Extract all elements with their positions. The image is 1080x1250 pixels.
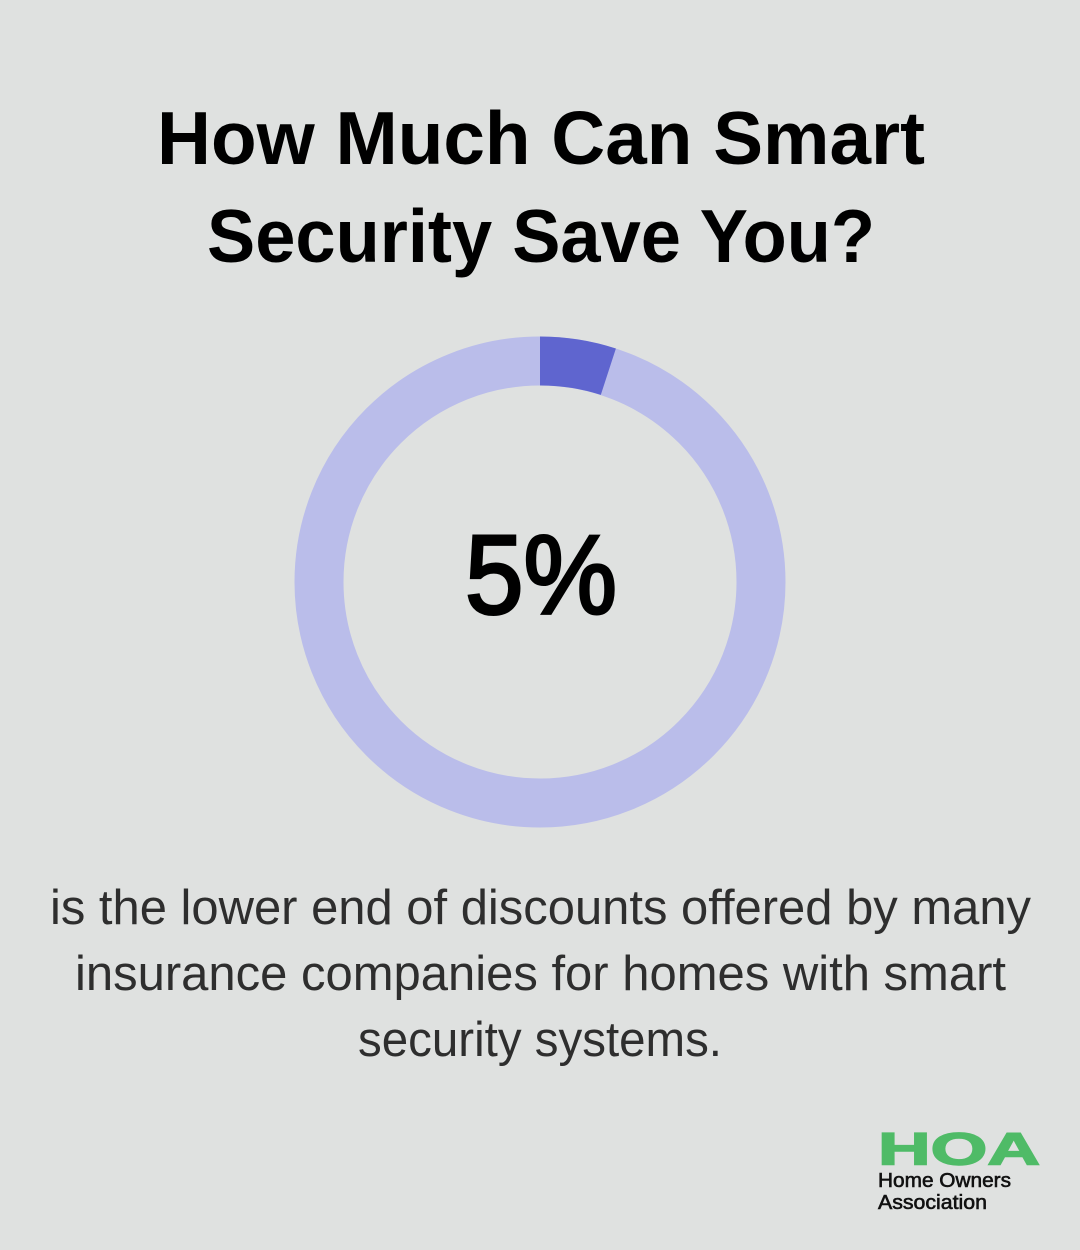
percentage value: 5% [465,512,617,638]
title [157,96,925,278]
logo: Home Owners Association [878,1124,1040,1214]
title: How Much Can Smart [157,96,925,180]
title: Security Save You? [207,194,875,278]
donut chart: 5% [319,336,761,803]
description text: security systems. [358,1013,722,1067]
description text: insurance companies for homes with smart [75,947,1006,1001]
logo wordmark: Association [878,1192,987,1214]
logo wordmark: Home Owners [878,1170,1011,1192]
description text: is the lower end of discounts offered by many [50,881,1031,935]
description text [50,881,1031,1067]
logo mark: HOA: HOA [878,1124,1040,1174]
highlighted wedge [540,336,616,395]
ring track [319,361,761,803]
logo wordmark [878,1170,1011,1214]
